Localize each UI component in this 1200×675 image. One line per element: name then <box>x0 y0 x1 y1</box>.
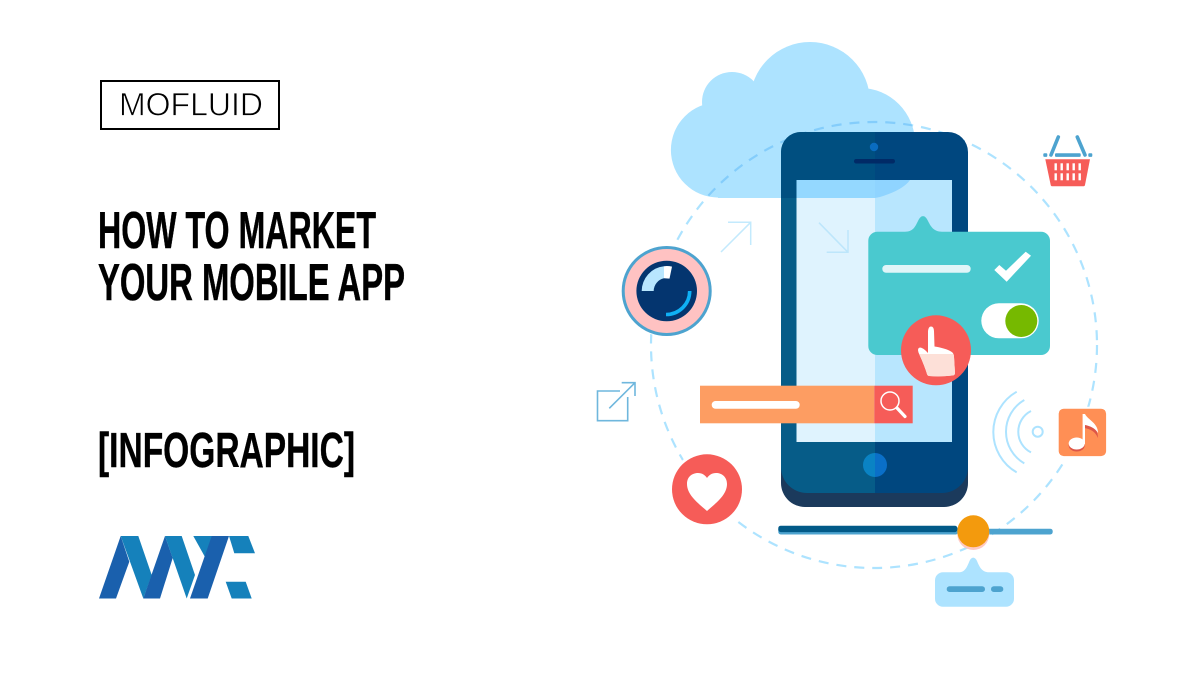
cloud <box>671 42 915 198</box>
dashed orbit circle <box>651 122 1097 568</box>
icon: camera lens <box>621 245 713 337</box>
camera dot <box>870 143 878 151</box>
card text line <box>882 265 971 273</box>
toggle switch <box>981 303 1039 338</box>
phone screen <box>796 180 952 442</box>
search bar <box>700 386 913 423</box>
tooltip bubble <box>935 558 1014 607</box>
icon: magnifier <box>881 392 905 416</box>
icon: music note <box>1057 407 1108 458</box>
arrow: up right <box>721 222 751 252</box>
icon: tap hand <box>901 315 971 385</box>
slider <box>778 515 1053 550</box>
subtitle: infographic: [INFOGRAPHIC] <box>98 424 355 478</box>
teal notification card <box>868 216 1050 355</box>
arrow: down right on screen <box>819 223 848 252</box>
title: YOUR MOBILE APP <box>98 254 405 312</box>
icon: external link box <box>598 383 635 421</box>
phone base <box>781 400 968 507</box>
brand box: MOFLUID <box>101 81 279 129</box>
brand box: MOFLUID: MOFLUID <box>119 86 263 122</box>
icon: heart <box>669 451 745 527</box>
title <box>98 202 405 312</box>
check mark <box>994 252 1031 282</box>
phone face <box>781 132 968 493</box>
phone <box>781 132 968 507</box>
MTC logo <box>99 536 255 598</box>
home button <box>863 453 887 477</box>
icon: basket <box>1043 137 1092 186</box>
speaker <box>854 159 895 164</box>
title: HOW TO MARKET <box>98 202 376 260</box>
icon: wifi signal <box>993 392 1043 472</box>
slider knob <box>957 515 989 550</box>
